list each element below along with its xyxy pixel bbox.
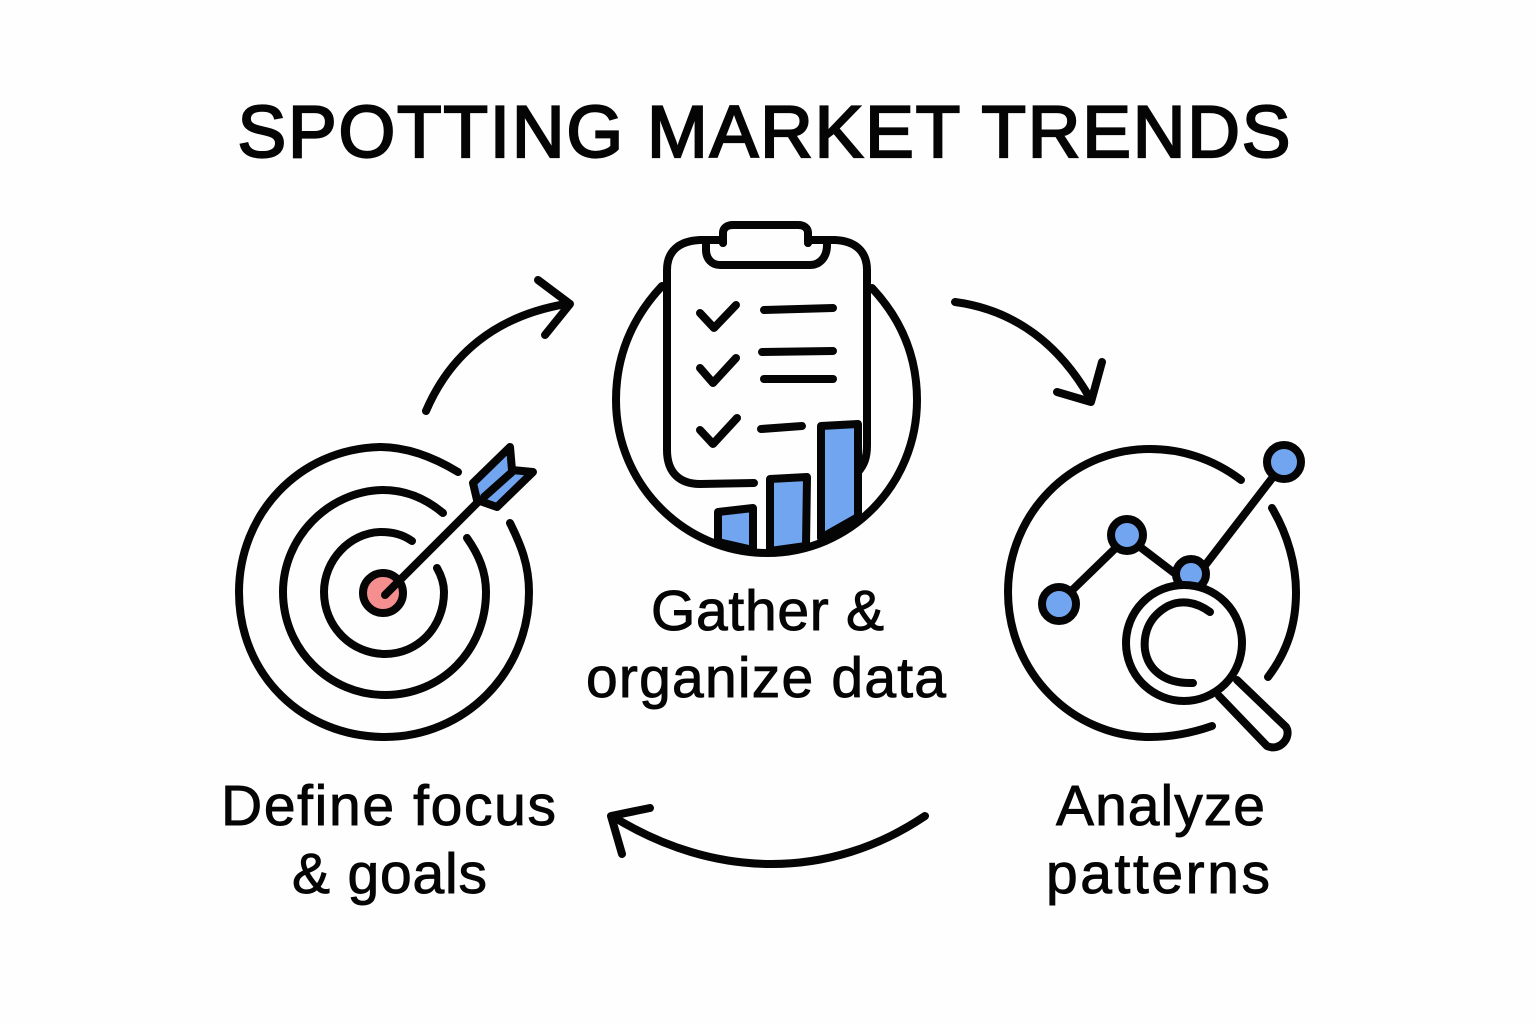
label: gather and organize data	[586, 579, 946, 710]
title: SPOTTING MARKET TRENDS	[238, 92, 1290, 173]
arrow: target to clipboard	[426, 280, 570, 411]
label: define focus and goals: Define focus	[221, 774, 556, 838]
label: analyze patterns: patterns	[1046, 842, 1270, 906]
label: gather and organize data: organize data	[586, 646, 946, 710]
label: analyze patterns	[1046, 774, 1270, 906]
arrow: analysis to target	[611, 808, 925, 864]
label: define focus and goals: & goals	[292, 842, 487, 906]
icon: clipboard with bar chart	[616, 225, 917, 553]
icon: target with arrow	[239, 447, 533, 737]
label: define focus and goals	[221, 774, 556, 906]
icon: magnifier over line chart	[1008, 445, 1301, 747]
label: gather and organize data: Gather &	[651, 579, 884, 643]
arrow: clipboard to analysis	[955, 302, 1102, 402]
label: analyze patterns: Analyze	[1056, 774, 1265, 838]
